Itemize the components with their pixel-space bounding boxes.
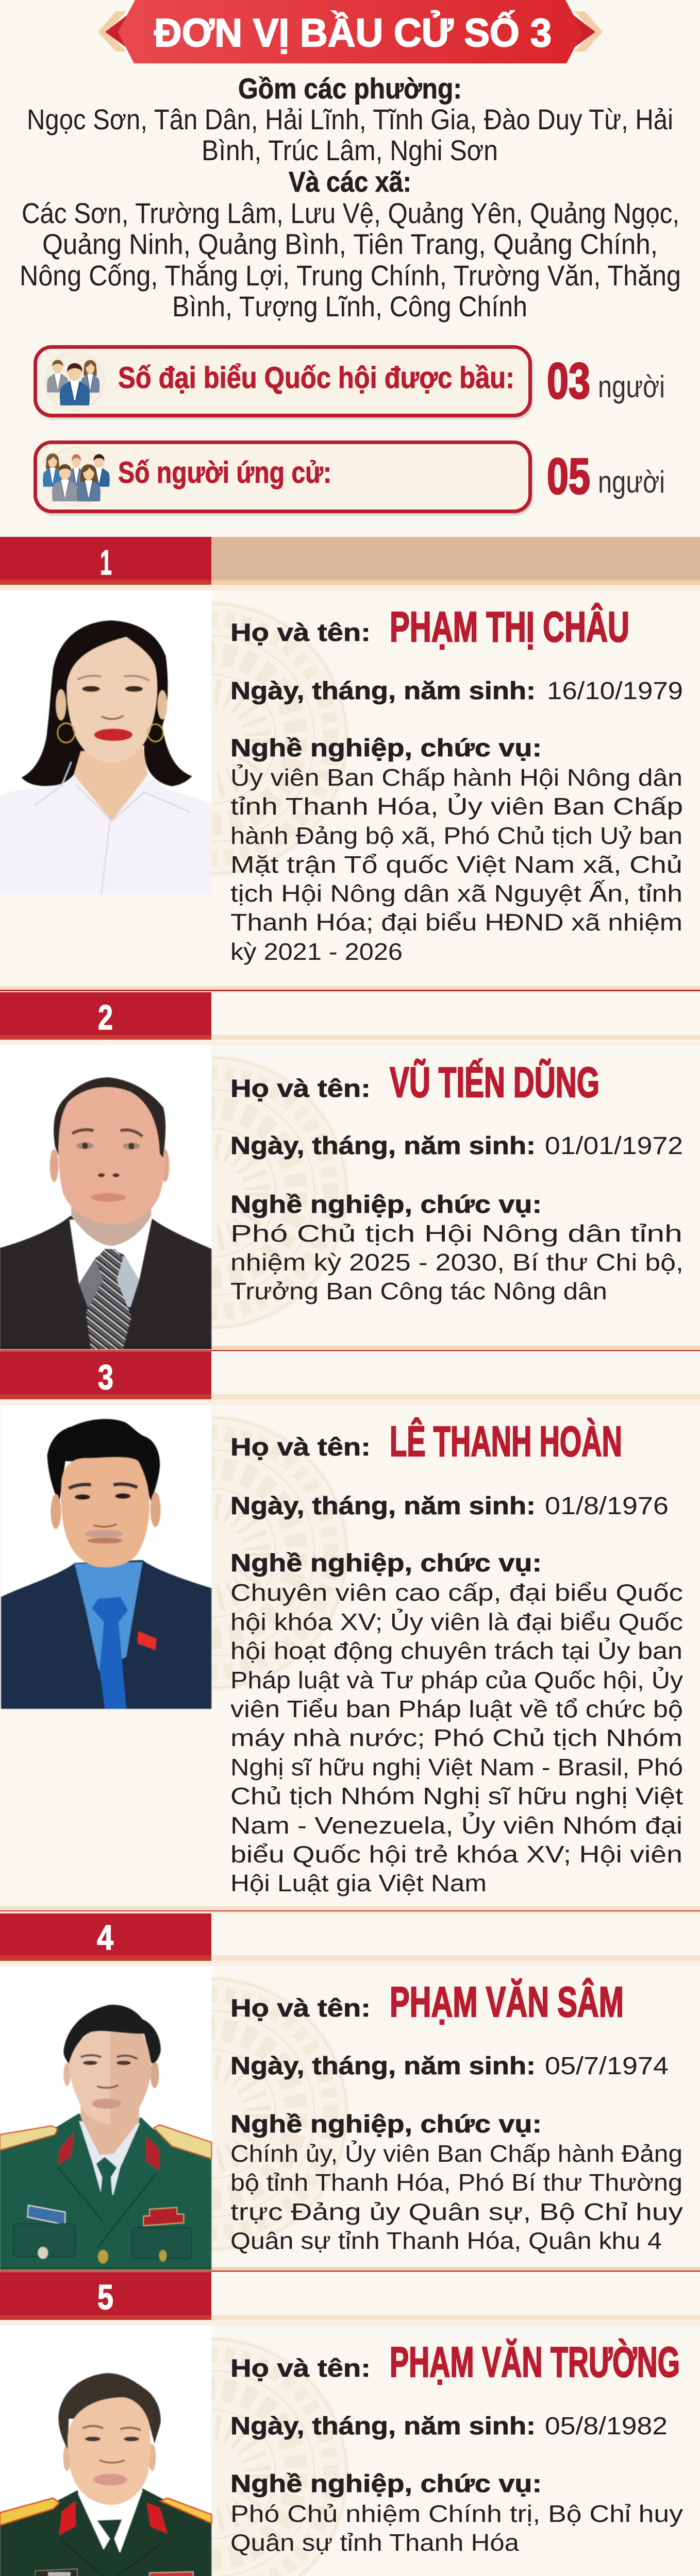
occupation: Chính ủy, Ủy viên Ban Chấp hành Đảng xyxy=(230,2140,682,2167)
birth date row: Ngày, tháng, năm sinh: xyxy=(230,1493,536,1520)
occupation: tỉnh Thanh Hóa, Ủy viên Ban Chấp xyxy=(230,793,683,820)
label: Số đại biểu Quốc hội được bầu: xyxy=(118,361,514,395)
occupation: Pháp luật và Tư pháp của Quốc hội, Ủy xyxy=(230,1667,683,1693)
occupation: Phó Chủ tịch Hội Nông dân tỉnh xyxy=(230,1220,682,1247)
occupation: Quân sự tỉnh Thanh Hóa xyxy=(230,2529,519,2556)
text block: wards and communes: Bình, Trúc Lâm, Nghi Sơn xyxy=(202,134,498,166)
portrait 1 xyxy=(0,590,211,894)
birth date row: Ngày, tháng, năm sinh: xyxy=(230,1132,536,1160)
birth date row: Ngày, tháng, năm sinh: xyxy=(230,677,536,705)
occupation xyxy=(230,1191,684,1304)
occupation: viên Tiểu ban Pháp luật về tổ chức bộ xyxy=(230,1696,683,1722)
occupation: Mặt trận Tổ quốc Việt Nam xã, Chủ xyxy=(230,851,682,878)
stat box: delegates to elect xyxy=(35,347,532,418)
occupation: kỳ 2021 - 2026 xyxy=(230,938,403,965)
name row xyxy=(230,1058,599,1106)
occupation: Thanh Hóa; đại biểu HĐND xã nhiệm xyxy=(230,909,682,936)
portrait 4 xyxy=(0,1966,211,2270)
occupation: biểu Quốc hội trẻ khóa XV; Hội viên xyxy=(230,1841,682,1868)
portrait 3 xyxy=(1,1405,211,1709)
occupation: hành Đảng bộ xã, Phó Chủ tịch Uỷ ban xyxy=(230,822,682,849)
name row xyxy=(230,603,629,651)
name row: Họ và tên: xyxy=(230,619,371,647)
occupation: Nam - Venezuela, Ủy viên Nhóm đại xyxy=(230,1812,682,1839)
text block: wards and communes: Gồm các phường: xyxy=(238,72,462,105)
panel: candidate 1 xyxy=(0,537,700,965)
value: 05 people: 05 xyxy=(547,448,590,504)
name row: VŨ TIẾN DŨNG xyxy=(390,1058,599,1106)
occupation xyxy=(230,2470,683,2556)
occupation: Quân sự tỉnh Thanh Hóa, Quân khu 4 xyxy=(230,2227,662,2254)
stat box: candidates xyxy=(35,442,532,514)
text block: wards and communes: Quảng Ninh, Quảng Bình, Tiên Trang, Quảng Chính, xyxy=(42,228,658,260)
occupation: Nghề nghiệp, chức vụ: xyxy=(230,735,542,762)
occupation xyxy=(230,735,683,965)
name row: Họ và tên: xyxy=(230,2355,371,2382)
birth date row xyxy=(230,1132,683,1160)
occupation: Phó Chủ nhiệm Chính trị, Bộ Chỉ huy xyxy=(230,2500,683,2527)
number 5: 5 xyxy=(97,2278,113,2317)
value: 05 people xyxy=(547,448,665,504)
birth date row xyxy=(230,2413,668,2440)
occupation: bộ tỉnh Thanh Hóa, Phó Bí thư Thường xyxy=(230,2169,682,2196)
occupation: hội hoạt động chuyên trách tại Ủy ban xyxy=(230,1637,682,1664)
panel: candidate 2 xyxy=(0,992,700,1349)
birth date row xyxy=(230,2053,669,2080)
occupation: trực Đảng ủy Quân sự, Bộ Chỉ huy xyxy=(230,2198,683,2225)
label: Số người ứng cử: xyxy=(118,456,331,489)
occupation: Nghề nghiệp, chức vụ: xyxy=(230,2470,542,2498)
portrait 2 xyxy=(0,1045,211,1349)
value: 03 people: người xyxy=(598,369,665,404)
number 2: 2 xyxy=(98,998,113,1037)
birth date row: 01/01/1972 xyxy=(545,1132,683,1160)
occupation: Chủ tịch Nhóm Nghị sĩ hữu nghị Việt xyxy=(230,1783,683,1809)
birth date row: 01/8/1976 xyxy=(545,1493,669,1520)
occupation: Chuyên viên cao cấp, đại biểu Quốc xyxy=(230,1579,683,1606)
birth date row: Ngày, tháng, năm sinh: xyxy=(230,2413,536,2440)
birth date row: 16/10/1979 xyxy=(547,677,683,705)
birth date row: 05/7/1974 xyxy=(545,2053,669,2080)
occupation: máy nhà nước; Phó Chủ tịch Nhóm xyxy=(230,1724,682,1751)
panel: candidate 3 xyxy=(0,1351,700,1896)
value: 03 people xyxy=(547,352,665,409)
name row: Họ và tên: xyxy=(230,1075,371,1103)
occupation: tịch Hội Nông dân xã Nguyệt Ấn, tỉnh xyxy=(230,880,682,907)
number 3: 3 xyxy=(98,1358,113,1397)
icon: group of five people xyxy=(43,447,110,506)
birth date row: 05/8/1982 xyxy=(545,2413,668,2440)
occupation xyxy=(230,1550,683,1896)
name row: Họ và tên: xyxy=(230,1995,371,2022)
name row xyxy=(230,2338,680,2386)
occupation: Nghị sĩ hữu nghị Việt Nam - Brasil, Phó xyxy=(230,1754,683,1781)
panel: candidate 5 xyxy=(0,2272,700,2576)
occupation xyxy=(230,2111,683,2254)
number 1: 1 xyxy=(100,543,112,582)
occupation: Nghề nghiệp, chức vụ: xyxy=(230,2111,542,2138)
title text: ĐƠN VỊ BẦU CỬ SỐ 3 xyxy=(154,10,552,55)
value: 03 people: 03 xyxy=(547,352,590,409)
occupation: Ủy viên Ban Chấp hành Hội Nông dân xyxy=(230,764,682,791)
birth date row xyxy=(230,1493,669,1520)
text block: wards and communes xyxy=(20,72,681,323)
value: 05 people: người xyxy=(598,465,665,499)
portrait 5 xyxy=(0,2326,211,2576)
text block: wards and communes: Bình, Tượng Lĩnh, Công Chính xyxy=(172,290,527,323)
occupation: hội khóa XV; Ủy viên là đại biểu Quốc xyxy=(230,1608,683,1635)
occupation: Trưởng Ban Công tác Nông dân xyxy=(230,1278,607,1304)
name row xyxy=(230,1417,622,1465)
name row: Họ và tên: xyxy=(230,1434,371,1461)
panel: candidate 4 xyxy=(0,1913,700,2270)
birth date row: Ngày, tháng, năm sinh: xyxy=(230,2053,536,2080)
name row xyxy=(230,1978,624,2026)
occupation: Hội Luật gia Việt Nam xyxy=(230,1870,487,1896)
icon: group of three people xyxy=(45,352,104,411)
occupation: Nghề nghiệp, chức vụ: xyxy=(230,1191,542,1218)
birth date row xyxy=(230,677,683,705)
title banner xyxy=(98,0,603,63)
number 4: 4 xyxy=(97,1918,113,1957)
text block: wards and communes: Và các xã: xyxy=(289,165,411,198)
occupation: Nghề nghiệp, chức vụ: xyxy=(230,1550,542,1577)
occupation: nhiệm kỳ 2025 - 2030, Bí thư Chi bộ, xyxy=(230,1249,684,1276)
